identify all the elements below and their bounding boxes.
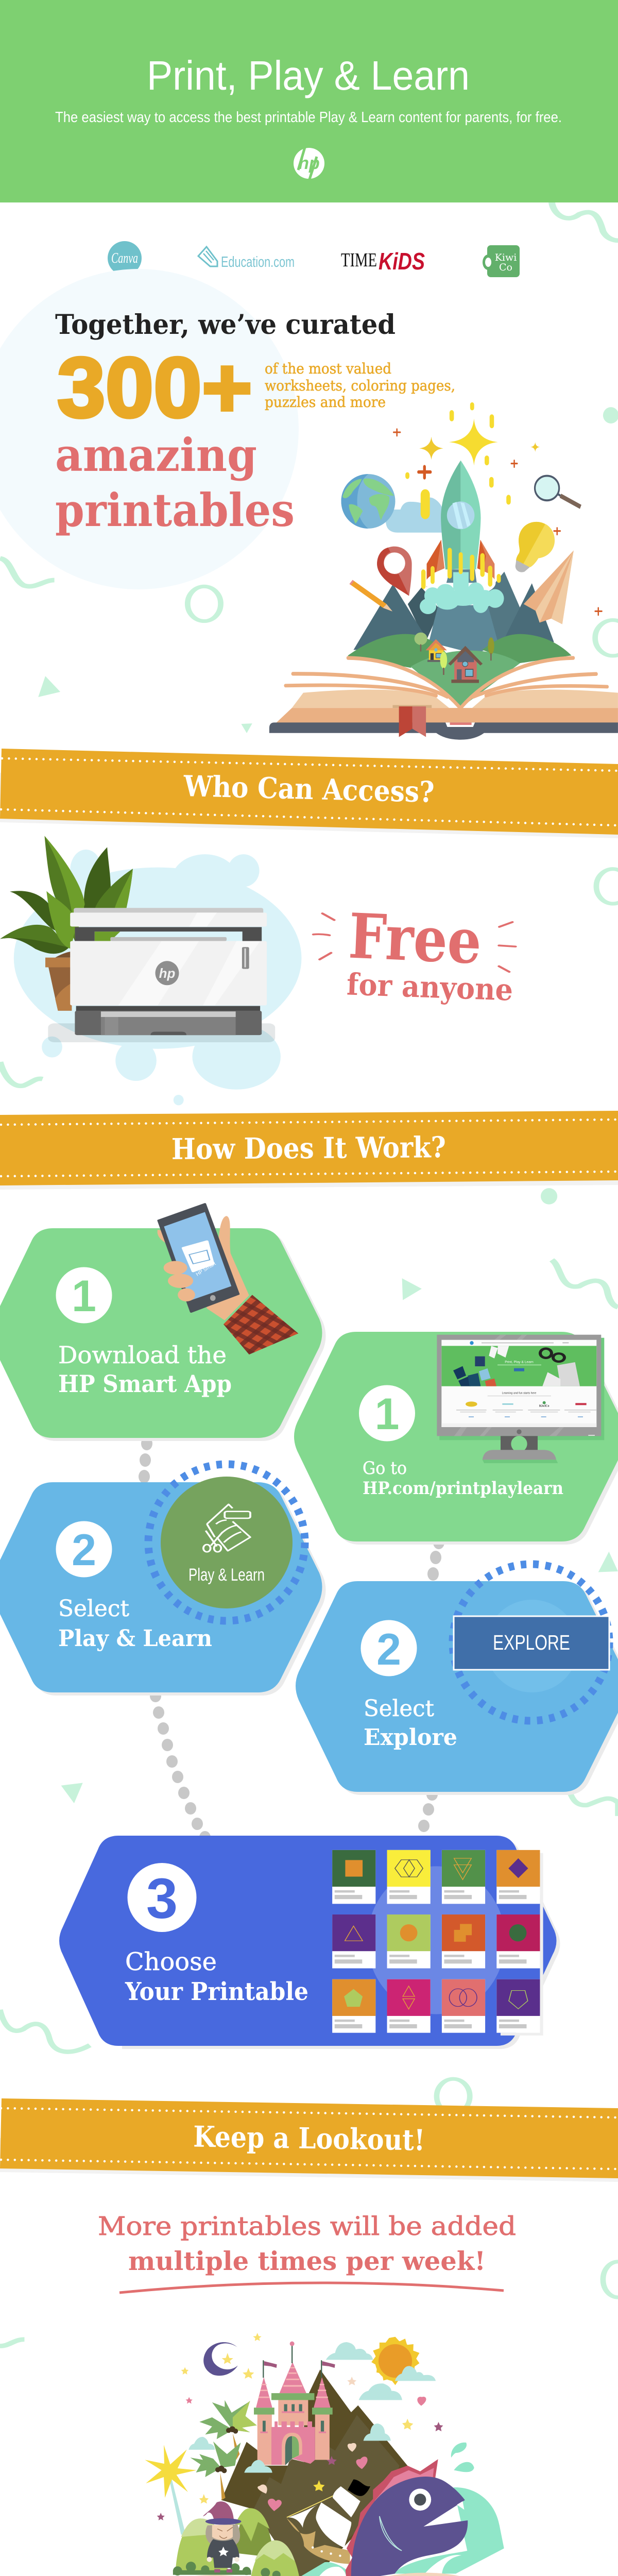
illustration: monitor showing website: KiwiCo [539,1405,549,1408]
connector dots [139,1437,444,1843]
icon: hp logo [294,147,324,179]
title: Print, Play & Learn [147,53,470,98]
descriptor: of the most valued [265,360,391,377]
icon: map pin [377,547,412,596]
descriptor [265,360,455,411]
illustration: printer with plant [0,836,301,1105]
heading: Who Can Access? [183,769,435,809]
step number [128,1863,197,1932]
step number [359,1385,415,1442]
heading: Keep a Lookout! [193,2120,425,2158]
panel: step 1 app [0,1204,325,1441]
hills [348,634,572,708]
illustration: rocket launching from open book [269,402,618,740]
illustration: monitor showing website: Print, Play & Learn [505,1360,534,1364]
banner: Keep a Lookout! [0,2098,618,2182]
grid of printable cards [332,1850,543,2036]
icon: pencil [350,580,392,612]
free: Free [347,900,483,978]
illustration: hand holding phone [158,1204,298,1354]
icon: paper airplane [524,550,574,624]
mountain [221,2369,407,2576]
step label: Your Printable [125,1977,308,2006]
emphasis rays [313,913,516,972]
panel: step 1 website [294,1332,618,1545]
logo: TIME for Kids: TIME [341,249,377,271]
palm trees [190,2400,257,2500]
step number: 1 [72,1272,96,1321]
green hills [173,2508,302,2576]
header band [0,0,618,202]
dashed ring [453,1564,609,1721]
banner: Who Can Access? [0,749,618,838]
mountain clouds [364,2424,391,2441]
bookmark [392,705,432,737]
globe [341,474,395,529]
pale circle backdrop [0,269,299,589]
text block: more printables [98,2211,516,2293]
step label: Play & Learn [58,1625,212,1652]
step number [360,1620,417,1676]
fins [427,540,494,589]
step number: 3 [146,1867,178,1930]
printer shadow [48,1023,275,1042]
step label: Download the [58,1341,227,1369]
phone app label: HP Smart [195,1261,217,1278]
icon: light bulb [516,522,555,572]
step label: Select [364,1696,434,1722]
castle cloud [244,2460,272,2473]
logo: Education.com [198,247,295,270]
logo: TIME for Kids [341,248,425,275]
logo: KiwiCo: Co [499,262,512,273]
button label: Play & Learn [188,1565,265,1585]
castle [254,2342,335,2465]
callout: free for anyone [313,900,516,1008]
dashed ring [148,1464,305,1621]
houses and trees [415,633,494,683]
step number: 2 [376,1625,401,1674]
step label: HP.com/printplaylearn [363,1478,563,1499]
flower pot [45,952,72,1011]
panel: step 2 play and learn [0,1464,325,1696]
logo: KiwiCo [483,245,520,277]
icon: hp logo: hp [298,154,320,173]
descriptor: puzzles and more [265,394,386,411]
cloud [386,497,443,533]
icon: magnifying glass [535,476,580,507]
wizard [203,2501,241,2572]
sea monster [346,2459,468,2576]
step label [58,1341,232,1398]
descriptor: worksheets, coloring pages, [265,377,455,394]
big number: 300+ [57,340,252,435]
heading: together: Together, we’ve curated [55,309,396,341]
text block: more printables: More printables will be added [98,2211,516,2241]
illustration: fantasy scene from open book [122,2333,510,2576]
blue blob backdrop [14,850,301,1105]
partner logos [108,241,520,277]
logo: TIME for Kids: KiDS [379,248,425,275]
logo: Canva: Canva [111,250,138,266]
step number: 1 [375,1389,399,1439]
step number [56,1267,112,1323]
for anyone: for anyone [346,967,513,1008]
step label [58,1596,212,1652]
step number: 2 [72,1526,96,1575]
amazing printables [55,428,295,537]
plant [0,836,133,954]
heading: How Does It Work? [171,1130,446,1166]
illustration: monitor showing website: Learning and fun starts here [502,1392,536,1395]
step label [364,1696,457,1751]
step label: HP Smart App [58,1370,232,1398]
banner: How Does It Work? [0,1111,618,1190]
step label: Explore [364,1724,457,1751]
panel: 300+ printables headline [0,269,455,589]
open book [269,658,618,740]
book pages [134,2573,504,2576]
logo: Canva [108,241,142,275]
step label: Go to [363,1458,407,1479]
icon: craft paper and scissors [203,1504,250,1552]
step label: Choose [125,1947,217,1976]
mountains [353,572,554,654]
panel: step 3 choose printable [59,1836,560,2049]
logo: KiwiCo: Kiwi [495,252,517,263]
moon and sky stars [157,2333,443,2520]
sun and clouds [188,2337,436,2450]
amazing printables: printables [55,483,295,537]
amazing printables: amazing [55,428,257,482]
exhaust streaks [421,548,501,589]
text block: more printables: multiple times per week! [128,2246,486,2276]
rocket body [441,461,481,569]
hearts and stars on mountain [258,2443,368,2511]
star wand [145,2445,196,2535]
printer [70,908,267,1035]
illustration: monitor showing website [437,1335,604,1463]
logo: Education.com: Education.com [221,254,295,270]
sparkles [393,402,602,615]
subtitle: The easiest way to access the best printable Play & Learn content for parents, for free. [55,109,562,126]
step label: Select [58,1596,129,1622]
exhaust and smoke [420,569,504,614]
step label [363,1458,563,1499]
ship [286,2479,370,2564]
waves [299,2443,504,2576]
explore button [454,1616,609,1670]
explore button: EXPLORE [493,1631,570,1654]
printer hp mark: hp [159,965,175,981]
step label [125,1947,308,2006]
step number [56,1521,112,1578]
app button [161,1477,293,1608]
panel: step 2 explore [296,1564,618,1795]
